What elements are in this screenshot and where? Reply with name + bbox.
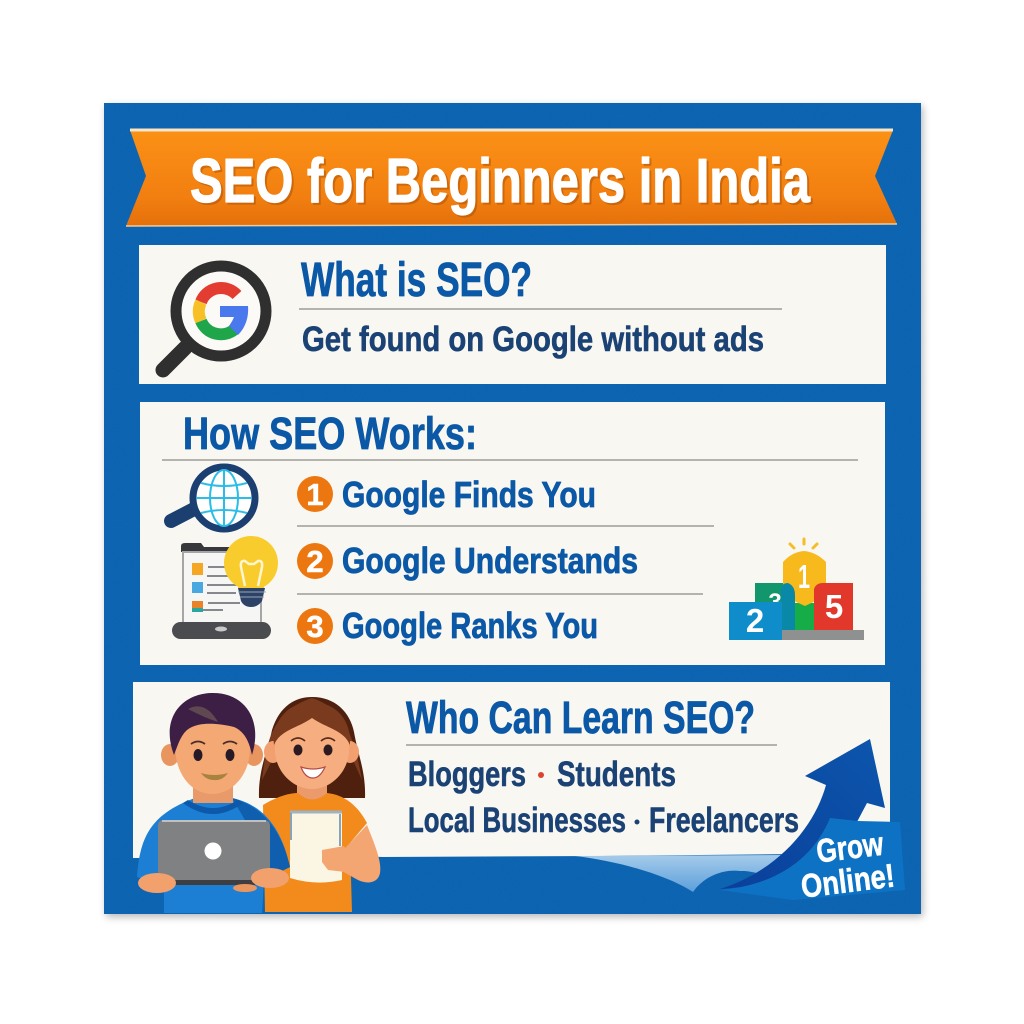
blue card texture — [104, 103, 921, 914]
text: what is SEO description: Get found on Google without ads — [302, 320, 764, 359]
icon: Google magnifying glass — [163, 266, 266, 370]
audience row 1: Students — [557, 755, 676, 794]
icon: ranking podium — [729, 539, 864, 640]
illustration: girl with notebook — [259, 697, 380, 912]
panel: how SEO works — [140, 402, 885, 665]
growth arrow — [720, 739, 885, 889]
title ribbon — [126, 130, 897, 226]
icon: ranking podium: 2 — [746, 602, 764, 639]
heading: who can learn SEO: Who Can Learn SEO? — [406, 692, 755, 743]
title shadow text: SEO for Beginners in India — [192, 149, 812, 218]
banner label: Online! — [799, 857, 897, 905]
heading: how SEO works: How SEO Works: — [183, 408, 477, 459]
step 1: Google Finds You — [342, 474, 596, 515]
audience row 1: Bloggers — [408, 755, 526, 794]
panel: who can learn SEO — [133, 682, 890, 858]
icon: ranking podium: 3 — [768, 589, 782, 616]
blue background card — [104, 103, 921, 914]
step 1: 1 — [306, 477, 324, 512]
step 2: Google Understands — [342, 540, 638, 581]
card shadow — [106, 106, 923, 917]
step 2: 2 — [306, 544, 324, 579]
panel: what is SEO — [139, 245, 886, 384]
banner label — [795, 824, 897, 905]
title text: SEO for Beginners in India — [190, 147, 810, 216]
light blue wave — [575, 855, 790, 892]
audience row 1 — [408, 755, 676, 794]
audience row 2: Local Businesses — [408, 801, 626, 840]
heading: what is SEO: What is SEO? — [301, 254, 532, 307]
arrow and grow online banner — [720, 739, 905, 905]
step 3: Google Ranks You — [342, 605, 598, 646]
icon: laptop with light bulb — [172, 536, 278, 639]
icon: globe magnifier — [171, 467, 255, 529]
icon: ranking podium: 1 — [798, 558, 810, 595]
icon: ranking podium: 5 — [825, 588, 843, 625]
banner: grow online — [720, 818, 905, 900]
audience row 2: Freelancers — [649, 801, 799, 840]
banner label: Grow — [814, 825, 885, 870]
illustration: boy with laptop — [137, 693, 290, 913]
step 3: 3 — [306, 609, 324, 644]
